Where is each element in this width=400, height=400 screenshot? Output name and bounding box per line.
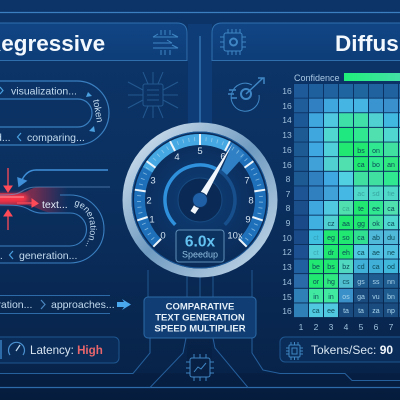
heatmap row labels: 10 [282,233,292,243]
heatmap cell tokens: an [387,162,395,169]
bottleneck channel lines [0,187,110,263]
icon: chip small [286,342,303,360]
gauge [127,127,273,273]
panel: regressive [0,22,188,364]
heatmap row labels: 15 [282,292,292,302]
gauge numbers: 0 [160,230,166,242]
gauge numbers: 8 [248,196,254,206]
heatmap cell tokens: or [313,279,320,286]
heatmap column labels: 5 [359,322,364,332]
stream text middle: generation... [19,250,77,262]
heatmap cell tokens: ca [312,308,320,315]
confidence legend [294,73,400,83]
stream text middle: generation... [74,200,97,246]
heatmap row labels: 16 [282,145,292,155]
heatmap row labels: 16 [282,306,292,316]
red arrows [4,168,38,230]
confidence legend: Confidence [294,73,340,83]
stream bottom: approaches... [51,299,115,311]
heatmap row labels: 16 [282,86,292,96]
gauge numbers: 7 [244,176,250,186]
icon: arrows [153,30,178,55]
heatmap row labels: 16 [282,101,292,111]
heatmap cell tokens: ca [357,250,365,257]
callout: caption: SPEED MULTIPLIER [154,324,246,334]
heatmap cell tokens: ga [357,294,365,301]
snake: top loop [0,81,109,145]
gauge numbers: 5 [197,146,203,157]
heatmap cell tokens: ca [372,264,380,271]
gauge hub [192,192,208,208]
tokens text: Tokens/Sec: 90 [311,343,393,357]
panel body left [0,23,187,373]
speedup readout: Speedup [182,250,218,260]
speedup readout: 6.0x [185,234,215,250]
heatmap column labels: 3 [329,322,334,332]
heatmap cell tokens: ca [342,206,350,213]
gauge numbers: 1 [149,214,155,226]
heatmap [293,84,400,317]
center channel [188,24,212,134]
heatmap column labels: 4 [344,322,349,332]
heatmap row labels: 14 [282,277,292,287]
icon: chip chart [186,354,214,381]
gauge numbers: 4 [174,152,180,163]
heatmap column labels: 2 [314,322,319,332]
icon: chip gear [220,29,246,55]
heatmap cell tokens: bz [342,264,350,271]
return arrow [18,170,108,186]
heatmap row labels: 14 [282,115,292,125]
latency text: Latency: High [30,344,103,357]
heatmap row labels: 7 [286,189,291,199]
stream text top: token [90,99,105,123]
stream text top [0,86,105,144]
heatmap cell tokens: ca [387,221,395,228]
callout: caption: COMPARATIVE [166,302,234,312]
heatmap cell tokens: ab [372,235,380,242]
heatmap cell tokens: bn [387,294,395,301]
heatmap cell tokens: fie [387,191,395,198]
heatmap cell tokens: cs [342,279,350,286]
stream text middle: text... [42,199,68,211]
gauge numbers: 9 [245,214,251,226]
heatmap row labels: 8 [286,203,291,213]
heatmap cell tokens: bs [357,148,365,155]
gauge numbers: 3 [150,176,156,186]
gauge bezel [127,127,273,273]
header band left [0,23,187,60]
heatmap cell tokens: gg [357,221,365,228]
gauge major ticks [135,134,265,247]
heatmap cell tokens: ac [357,191,365,198]
heatmap cell tokens: ca [357,162,365,169]
heatmap column labels: 1 [299,322,304,332]
heatmap cell tokens: np [387,308,395,315]
heatmap cell tokens: eg [327,235,335,242]
gauge inner arc [165,165,216,225]
latency box [0,337,119,363]
heatmap cell tokens: sd [372,191,380,198]
tokens box [280,337,400,362]
heatmap cell tokens: on [372,148,380,155]
heatmap cell tokens: ss [372,279,380,286]
heatmap cell tokens: za [372,308,380,315]
heatmap cell tokens: aa [342,221,350,228]
header band right [212,23,400,60]
heatmap row labels: 9 [286,218,291,228]
icon: target [228,78,264,111]
heatmap column labels: 7 [389,322,394,332]
heatmap column labels [299,322,394,332]
callout: caption: TEXT GENERATION [155,312,245,324]
heatmap cell tokens: ok [372,221,380,228]
heatmap cell tokens: bo [372,162,380,169]
heatmap cell tokens: so [342,235,350,242]
gauge needle [190,143,233,214]
heatmap row labels: 16 [282,160,292,170]
heatmap row labels [282,86,292,316]
gauge scale band [140,140,260,243]
heatmap cell tokens: cd [357,264,365,271]
stream text top: visualization... [11,86,77,98]
gauge numbers: 2 [146,196,152,206]
speedup readout [176,230,224,262]
heatmap cell tokens: ne [387,250,395,257]
heatmap row labels: 12 [282,247,292,257]
heatmap cell tokens: ae [372,250,380,257]
heatmap cell tokens: dr [328,250,335,257]
heatmap cell tokens: od [387,264,395,271]
heatmap cell tokens: ee [372,206,380,213]
panel: diffusion [212,23,400,373]
heatmap cell tokens: ee [327,308,335,315]
heatmap cell tokens: cz [328,221,335,228]
heatmap cell tokens: in [313,294,319,301]
stream bottom [0,296,131,314]
heatmap cell tokens: gs [357,279,365,286]
heatmap cell tokens: ta [343,308,349,315]
icon: chip [128,72,178,118]
icon: gauge [8,342,24,355]
heatmap column labels: 6 [374,322,379,332]
red bottleneck [0,187,68,213]
heatmap cell tokens: bs [327,264,335,271]
heatmap cell tokens: te [358,206,364,213]
callout: caption [144,297,256,338]
stream text middle [0,199,97,262]
heatmap cell tokens: ct [313,250,319,257]
gauge minor ticks [139,139,261,243]
heatmap cell tokens: hg [327,279,335,286]
stream text top: comparing... [27,132,85,144]
heatmap cell tokens: ca [387,206,395,213]
gauge inner circle [178,178,222,222]
gauge numbers [146,146,254,242]
heatmap cell tokens: be [312,264,320,271]
heatmap cell tokens: du [387,235,395,242]
heatmap cell tokens: nn [387,279,395,286]
heatmap row labels: 8 [286,174,291,184]
heatmap row labels: 13 [282,130,292,140]
heatmap cell tokens: ca [357,235,365,242]
panel body right [212,23,400,373]
heatmap row labels: 13 [282,262,292,272]
heatmap cell tokens: ct [313,235,319,242]
gauge numbers: 10x [227,230,243,242]
heatmap cell tokens: in [328,294,334,301]
gauge numbers: 6 [220,152,226,162]
heatmap cell tokens: vu [372,294,380,301]
heatmap cell tokens [312,148,395,315]
heatmap cell tokens: ta [358,308,364,315]
heatmap cell tokens: os [342,294,350,301]
heatmap cell tokens: eh [342,250,350,257]
